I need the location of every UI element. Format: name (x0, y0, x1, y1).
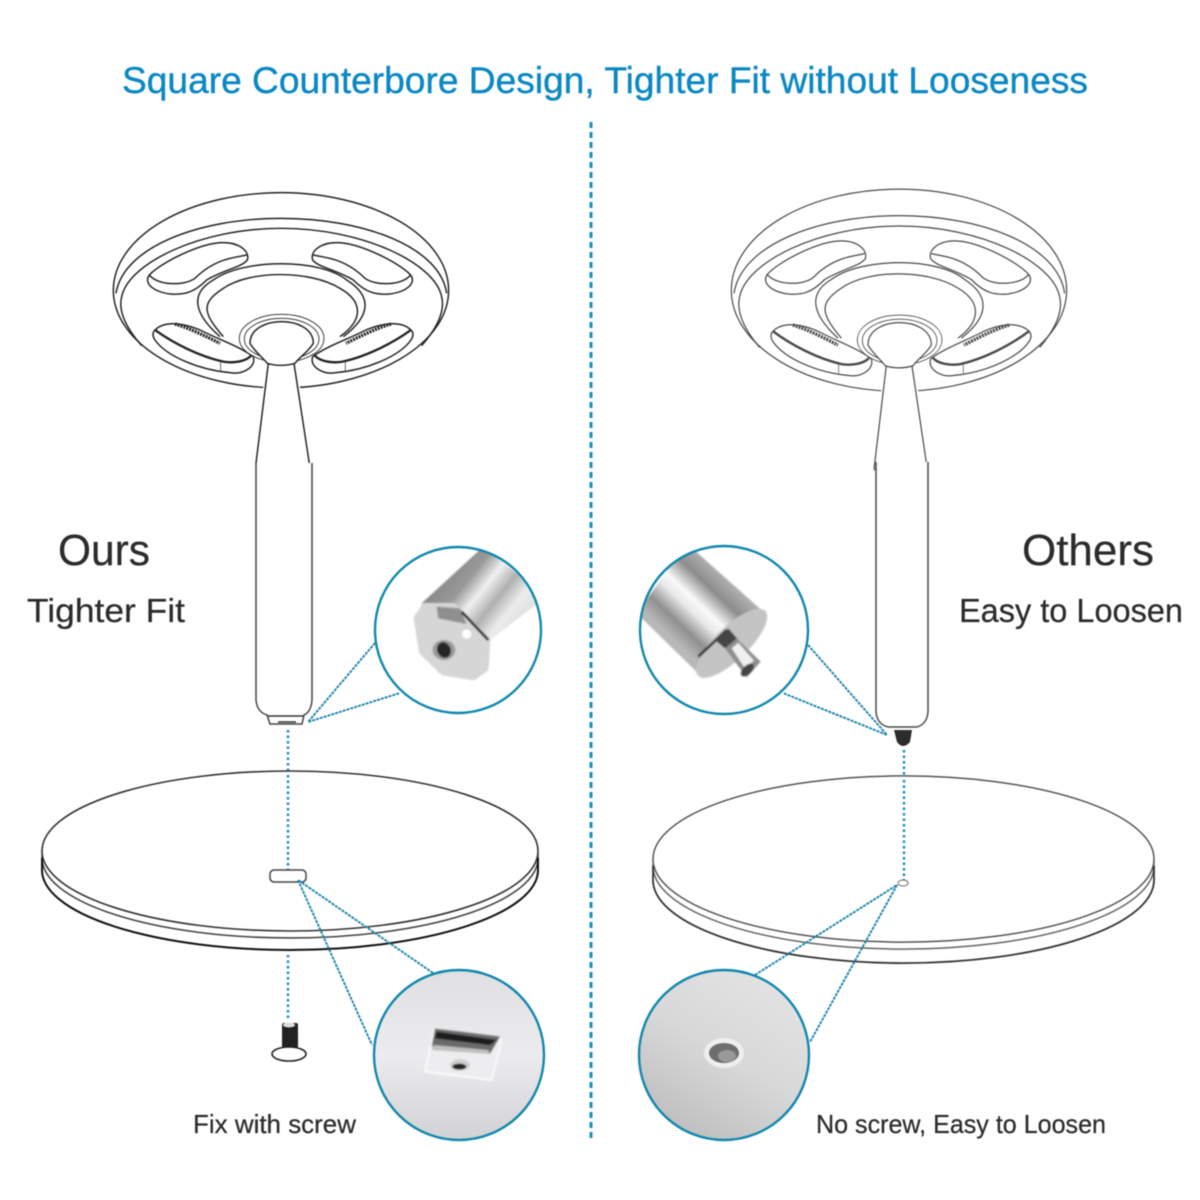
label: tighter fit: Tighter Fit (27, 592, 185, 629)
small hole (898, 880, 908, 886)
screw (272, 1022, 306, 1061)
caption: fix with screw: Fix with screw (193, 1109, 356, 1139)
base plate (42, 771, 538, 950)
left product: ours (27, 193, 547, 1140)
square hole (270, 870, 306, 882)
callout lines (755, 645, 897, 1042)
stem (256, 463, 312, 724)
dotted guide through plate (903, 780, 905, 880)
dotted guide through plate (287, 775, 289, 875)
dotted guide (903, 750, 905, 882)
caption: no screw: No screw, Easy to Loosen (816, 1109, 1106, 1139)
top disc with tapered neck (113, 193, 449, 480)
zoom circle: pin shaft (637, 543, 808, 714)
stem (876, 462, 928, 727)
label: others: Others (1022, 526, 1154, 575)
zoom circle: square counterbore (374, 970, 544, 1140)
right product: others (637, 189, 1183, 1140)
title: Square Counterbore Design, Tighter Fit without Looseness (122, 60, 1088, 101)
zoom circle: square-end shaft (375, 547, 547, 713)
callout lines (298, 643, 433, 1045)
top disc with tapered neck (731, 189, 1067, 487)
label: easy to loosen: Easy to Loosen (959, 592, 1183, 629)
zoom circle: round hole (639, 970, 809, 1140)
dotted guide (287, 730, 289, 1020)
base plate (653, 776, 1154, 963)
threaded pin (894, 730, 912, 746)
center divider (590, 122, 592, 1142)
label: ours: Ours (58, 526, 150, 575)
